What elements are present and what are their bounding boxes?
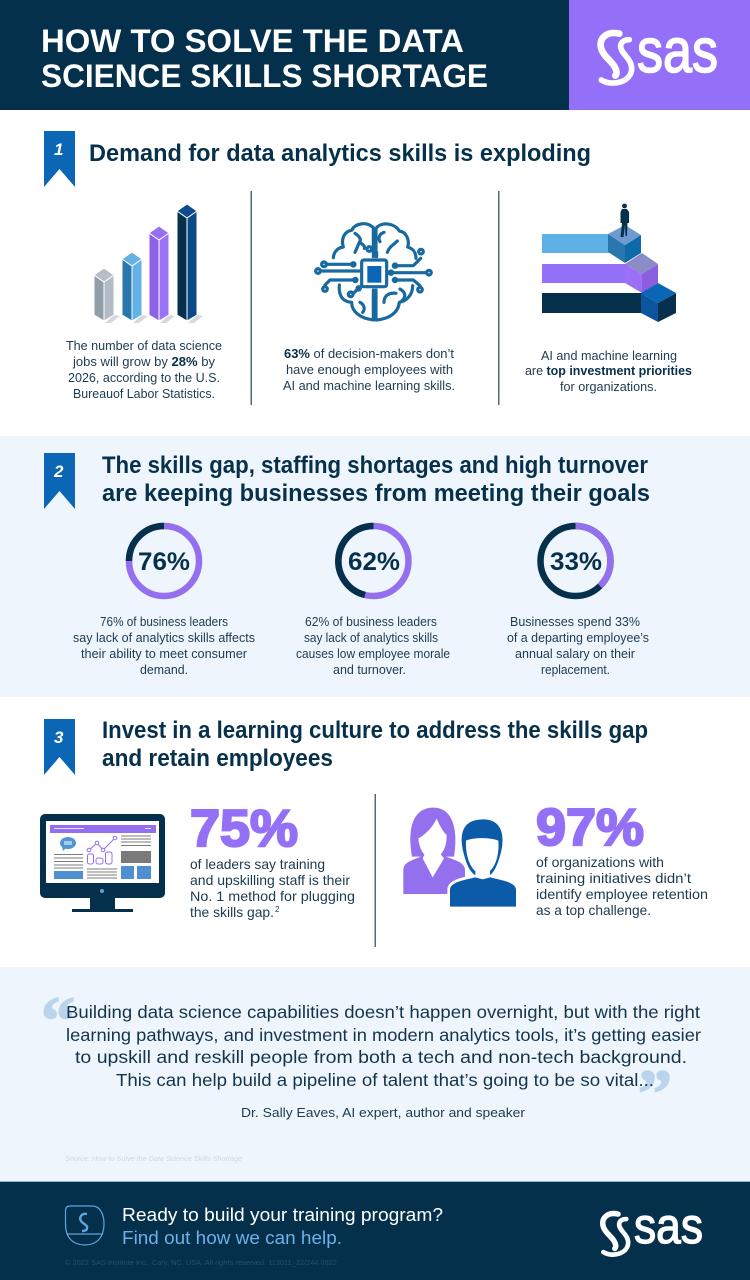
icon: two people	[403, 808, 519, 909]
logo: SAS header	[601, 17, 718, 86]
chart: isometric rising bars	[94, 204, 203, 323]
text: jobs growth: Bureauof Labor Statistics.	[73, 386, 215, 401]
text: AI priorities: are top investment priorities	[525, 363, 692, 378]
stat: 75 percent: 75%	[190, 800, 298, 858]
text: 63 percent: have enough employees with	[286, 362, 453, 377]
stat: 75 percent: and upskilling staff is their	[190, 872, 350, 888]
stat: 97 percent: training initiatives didn’t	[536, 870, 691, 886]
heading: section 2: The skills gap, staffing shortages and high turnover	[102, 452, 648, 479]
icon: ribbon 3: 3	[54, 728, 64, 747]
panel: section 3 learning culture	[40, 717, 708, 947]
chart: donut 76 percent	[129, 526, 199, 596]
icon: isometric staircase with person	[542, 204, 676, 322]
icon: ribbon 2: 2	[53, 462, 64, 481]
text: jobs growth: The number of data science	[66, 338, 222, 353]
copyright note: © 2022 SAS Institute Inc., Cary, NC, USA. All rights reserved. 113011_22/244 0922	[65, 1259, 337, 1267]
text: 33 percent: of a departing employee’s	[507, 630, 649, 645]
icon: ribbon 3	[44, 719, 75, 775]
call to action	[122, 1205, 443, 1248]
icon: computer monitor dashboard	[40, 814, 165, 912]
icon: opening quote mark: “	[41, 982, 75, 1058]
heading: section 2	[102, 452, 650, 507]
title: HOW TO SOLVE THE DATA	[41, 23, 464, 59]
panel: section 2 skills gap	[0, 436, 750, 697]
text: 62 percent: causes low employee morale	[296, 646, 450, 661]
stat: 97 percent: identify employee retention	[536, 886, 708, 902]
text: 62 percent: 62% of business leaders	[305, 614, 437, 629]
quote text: This can help build a pipeline of talent that’s going to be so vital...	[116, 1070, 654, 1090]
quote attribution: Dr. Sally Eaves, AI expert, author and speaker	[241, 1105, 526, 1120]
heading: section 1: Demand for data analytics skills is exploding	[89, 140, 591, 167]
chart: donut 33 percent	[540, 526, 611, 596]
text: 33 percent: annual salary on their	[515, 646, 636, 661]
title: SCIENCE SKILLS SHORTAGE	[41, 58, 488, 94]
icon: ribbon 2	[44, 453, 75, 509]
text: 76 percent: 76% of business leaders	[100, 614, 228, 629]
text: 63 percent: 63% of decision-makers don’t	[284, 346, 454, 361]
stat: 75 percent	[190, 800, 355, 920]
stat: 75 percent: 2	[275, 905, 280, 914]
logo: SAS header: sas	[637, 17, 718, 86]
text: 63 percent: AI and machine learning skills.	[283, 378, 455, 393]
quote text: learning pathways, and investment in modern analytics tools, it’s getting easier	[66, 1025, 701, 1045]
icon: person silhouette	[620, 204, 629, 237]
heading: section 2: are keeping businesses from meeting their goals	[102, 480, 650, 507]
text: 76 percent: say lack of analytics skills affects	[73, 630, 255, 645]
text: AI priorities: for organizations.	[560, 379, 657, 394]
chart: donut 76 percent: 76%	[138, 548, 190, 576]
stat: 75 percent: the skills gap.	[190, 904, 274, 920]
panel: expert quote	[0, 967, 750, 1182]
panel: section 1 demand	[44, 131, 692, 405]
text: jobs growth: jobs will grow by 28% by	[72, 354, 215, 369]
text: 76 percent: demand.	[140, 662, 188, 677]
text: jobs growth: 2026, according to the U.S.	[68, 370, 220, 385]
panel: header	[0, 0, 750, 110]
text: 33 percent	[507, 614, 649, 677]
source note: Source: How to Solve the Data Science Skills Shortage	[65, 1156, 242, 1163]
quote text: Building data science capabilities doesn’t happen overnight, but with the right	[66, 1002, 700, 1022]
panel: footer	[0, 1181, 750, 1280]
icon: ribbon 1	[44, 131, 75, 187]
stat: 97 percent	[536, 799, 708, 918]
text: 33 percent: Businesses spend 33%	[510, 614, 640, 629]
stat: 75 percent: of leaders say training	[190, 856, 325, 872]
quote text	[66, 1002, 701, 1090]
title	[41, 23, 488, 94]
text: jobs growth	[66, 338, 222, 401]
icon: SAS badge	[66, 1206, 104, 1245]
chart: donut 33 percent: 33%	[550, 548, 602, 576]
text: 33 percent: replacement.	[541, 662, 610, 677]
stat: 75 percent: No. 1 method for plugging	[190, 888, 355, 904]
icon: circuit brain	[316, 224, 431, 320]
chart: donut 62 percent: 62%	[348, 548, 400, 576]
call to action: Ready to build your training program?	[122, 1205, 443, 1225]
logo: SAS footer: sas	[634, 1198, 703, 1254]
heading: section 3: and retain employees	[102, 745, 333, 772]
text: AI priorities	[525, 348, 692, 394]
call to action: Find out how we can help.	[122, 1228, 342, 1248]
icon: closing quote mark: ”	[638, 1055, 672, 1131]
stat: 97 percent: as a top challenge.	[536, 902, 651, 918]
text: 62 percent	[296, 614, 450, 677]
text: 62 percent: and turnover.	[333, 662, 406, 677]
logo: SAS footer	[603, 1198, 703, 1255]
text: 62 percent: say lack of analytics skills	[304, 630, 438, 645]
stat: 97 percent: 97%	[536, 799, 644, 857]
heading: section 3	[102, 717, 648, 772]
icon: ribbon 1: 1	[54, 140, 63, 159]
heading: section 3: Invest in a learning culture to address the skills gap	[102, 717, 648, 744]
text: 76 percent: their ability to meet consumer	[81, 646, 248, 661]
stat: 97 percent: of organizations with	[536, 854, 664, 870]
quote text: to upskill and reskill people from both a tech and non-tech background.	[75, 1047, 687, 1067]
text: 76 percent	[73, 614, 255, 677]
text: AI priorities: AI and machine learning	[541, 348, 677, 363]
chart: donut 62 percent	[338, 526, 408, 596]
text: 63 percent	[283, 346, 455, 393]
